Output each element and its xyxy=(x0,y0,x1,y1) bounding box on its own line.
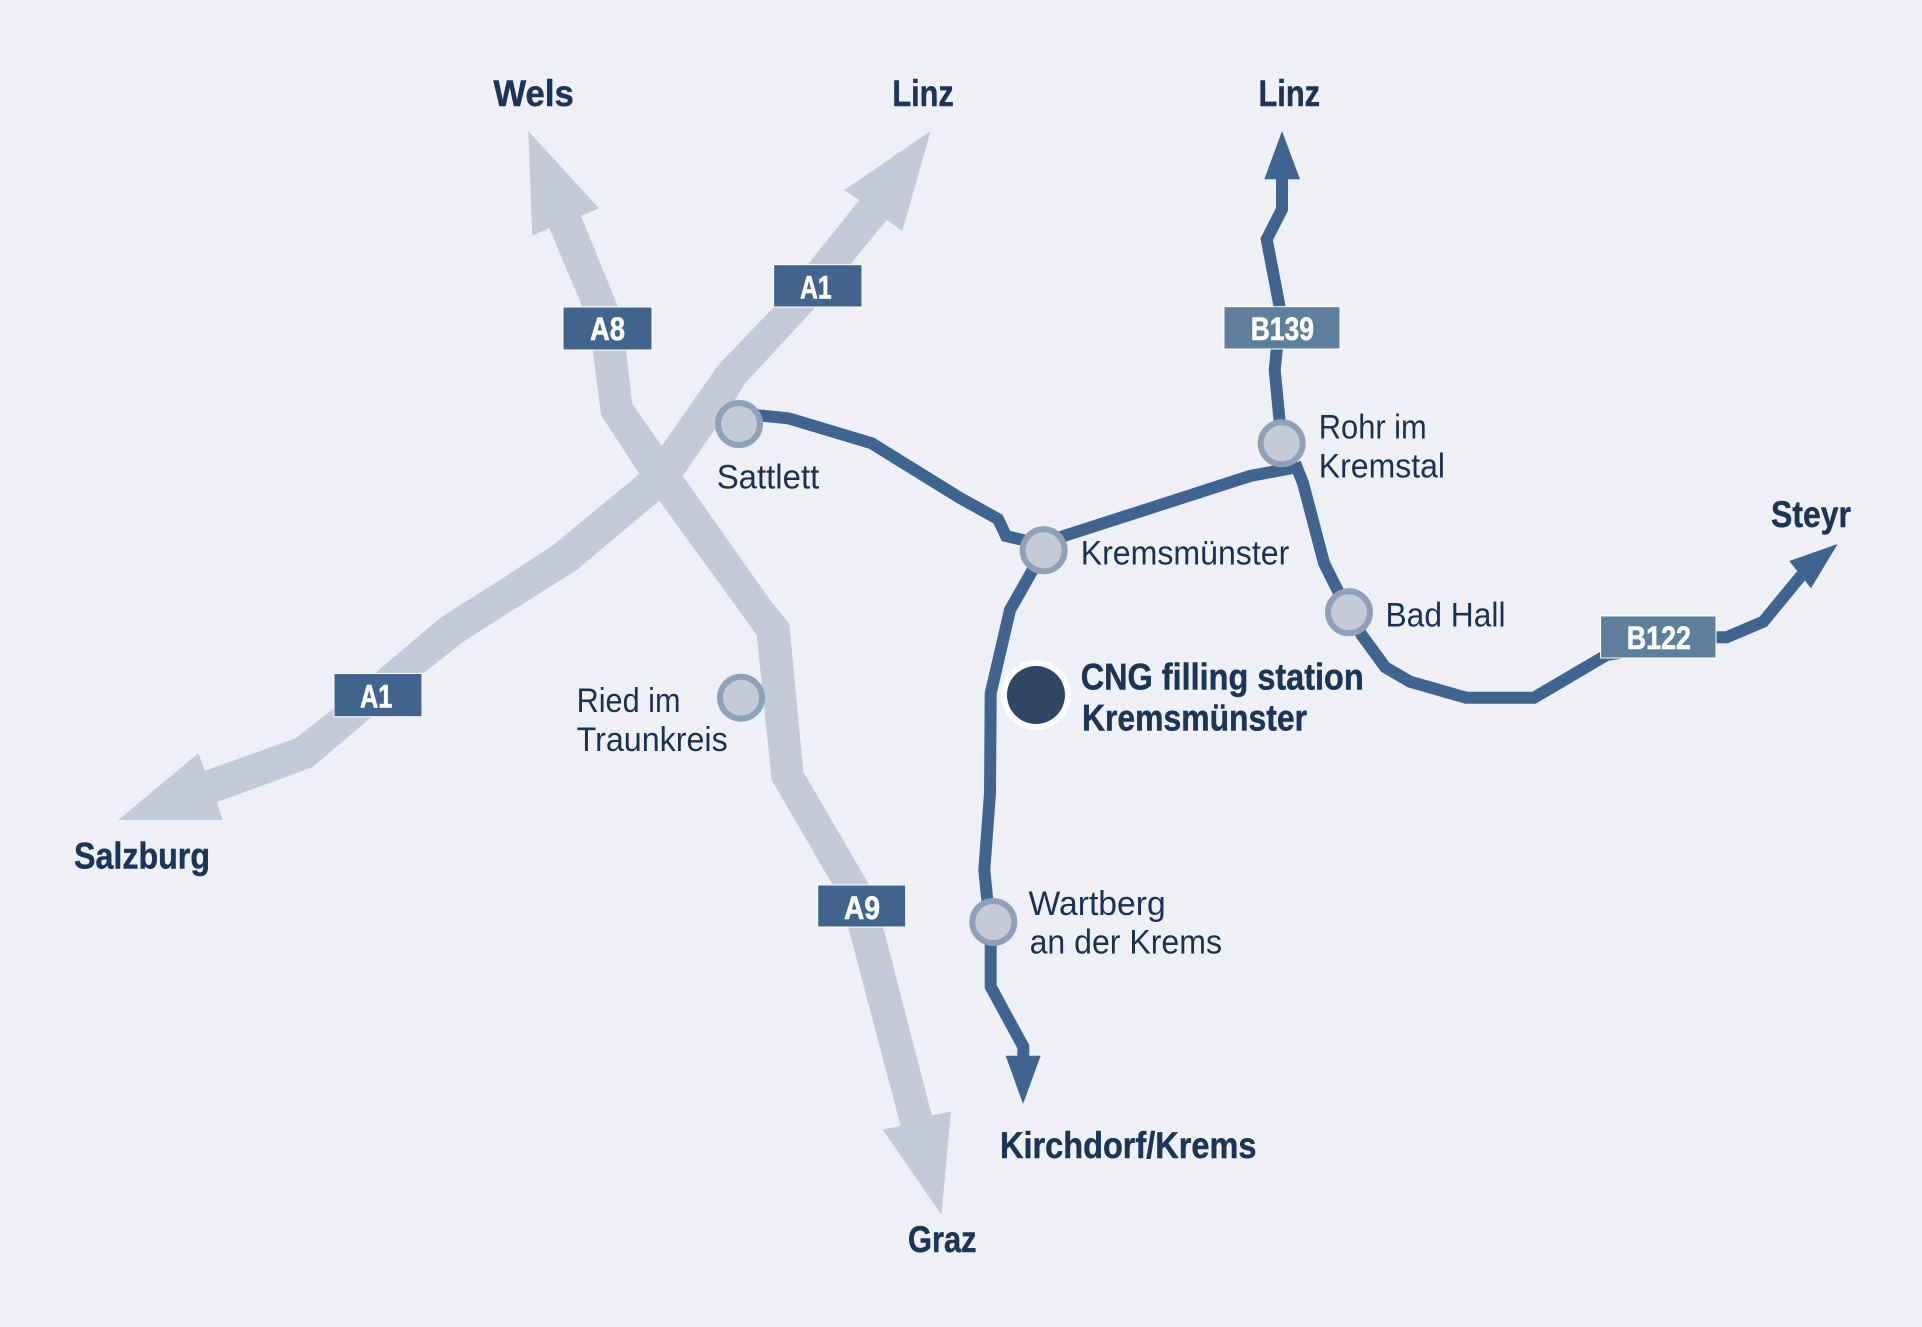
road sign A1 south: A1 xyxy=(360,679,392,715)
destination label: Steyr: Steyr xyxy=(1771,493,1851,535)
road sign A1 south xyxy=(334,674,422,717)
destination label: Linz via A1: Linz xyxy=(892,72,954,114)
road sign B122: B122 xyxy=(1627,620,1691,656)
station label: Kremsmünster xyxy=(1082,697,1307,739)
road: Sattlett to Kremsmünster xyxy=(745,414,1044,545)
town label: Wartberg an der Krems: Wartberg xyxy=(1028,885,1166,923)
town label: Sattlett: Sattlett xyxy=(717,458,820,496)
road sign A1 north xyxy=(774,265,862,307)
road sign A9: A9 xyxy=(844,890,880,926)
destination label: Linz via B139: Linz xyxy=(1258,72,1320,114)
road B122 with arrow to Steyr xyxy=(1295,463,1838,698)
town label: Ried im Traunkreis: Ried im xyxy=(577,682,680,720)
road sign B139: B139 xyxy=(1251,311,1314,347)
CNG filling station marker xyxy=(1001,660,1071,730)
town label: Rohr im Kremstal: Rohr im xyxy=(1319,408,1427,446)
road sign A9 xyxy=(818,885,906,927)
town label: Rohr im Kremstal xyxy=(1319,408,1445,486)
station label xyxy=(1081,655,1364,739)
place marker: Bad Hall xyxy=(1328,591,1370,633)
place marker: Rohr im Kremstal xyxy=(1261,422,1303,464)
town label: Kremsmünster: Kremsmünster xyxy=(1081,534,1289,572)
road sign A8 xyxy=(563,307,652,350)
motorway A8 / A9: Wels to Graz xyxy=(528,131,951,1215)
road: Kremsmünster to Rohr im Kremstal xyxy=(1044,467,1298,543)
town label: Wartberg an der Krems: an der Krems xyxy=(1030,924,1222,962)
town label: Ried im Traunkreis: Traunkreis xyxy=(577,721,728,759)
place marker: Kremsmünster xyxy=(1023,529,1065,571)
station label: CNG filling station xyxy=(1081,655,1364,697)
town label: Wartberg an der Krems xyxy=(1028,885,1222,962)
place marker: Sattlett xyxy=(718,403,760,445)
destination label: Wels: Wels xyxy=(493,72,574,114)
road sign A8: A8 xyxy=(590,311,625,347)
road B139 with arrow to Linz xyxy=(1264,131,1300,425)
road with arrow to Kirchdorf/Krems xyxy=(984,560,1041,1104)
destination label: Graz: Graz xyxy=(908,1218,976,1260)
motorway A1: Salzburg to Linz xyxy=(118,131,931,820)
road sign A1 north: A1 xyxy=(800,269,832,305)
road sign B122 xyxy=(1601,616,1716,658)
place marker: Wartberg an der Krems xyxy=(972,901,1014,943)
place marker: Ried im Traunkreis xyxy=(720,677,762,719)
town label: Ried im Traunkreis xyxy=(577,682,728,759)
town label: Bad Hall: Bad Hall xyxy=(1386,596,1506,634)
town label: Rohr im Kremstal: Kremstal xyxy=(1319,448,1445,486)
destination label: Salzburg: Salzburg xyxy=(74,835,210,877)
destination label: Kirchdorf/Krems: Kirchdorf/Krems xyxy=(1000,1124,1256,1166)
road sign B139 xyxy=(1224,307,1340,349)
